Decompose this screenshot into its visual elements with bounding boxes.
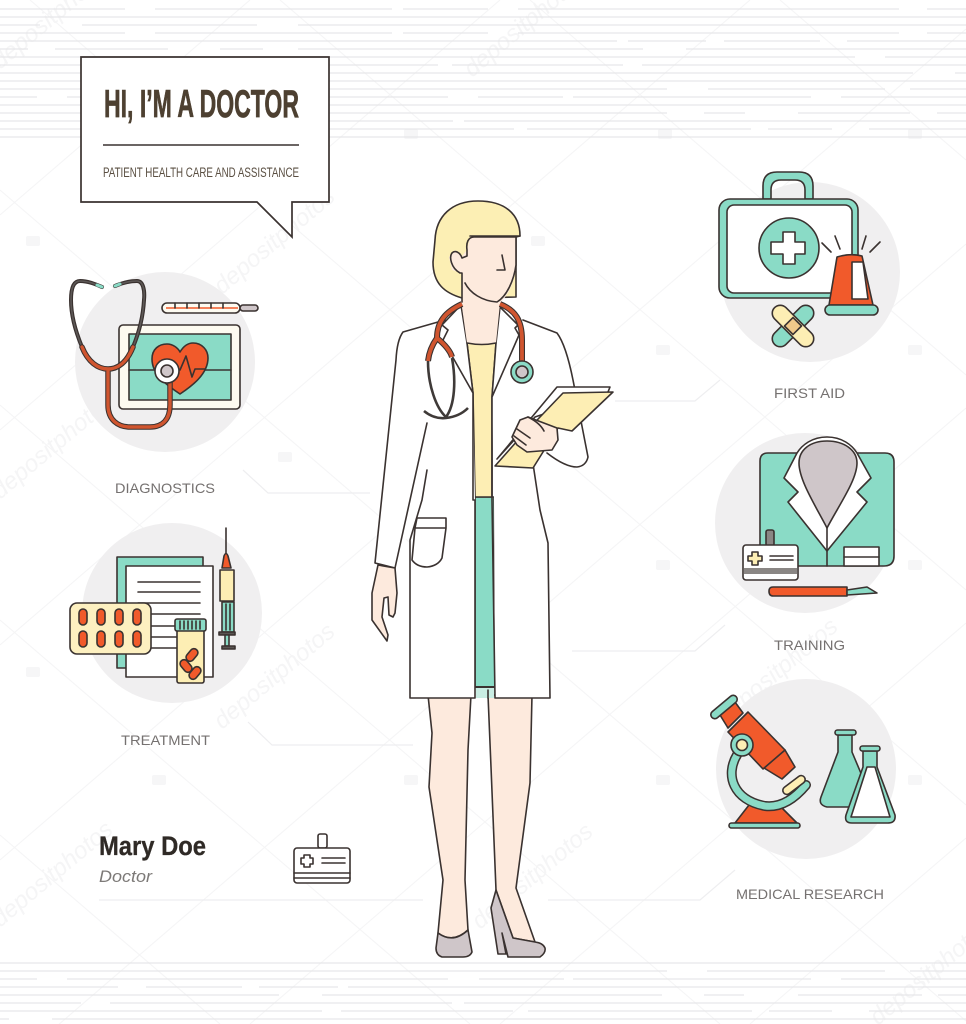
text: depositphotos bbox=[209, 618, 340, 735]
figure: doctor bbox=[372, 201, 613, 957]
icon: diagnostics bbox=[71, 272, 258, 452]
label: medical research: MEDICAL RESEARCH bbox=[736, 886, 884, 902]
legs and shoes bbox=[428, 695, 545, 957]
skirt bbox=[475, 497, 495, 687]
icon: training bbox=[715, 433, 895, 613]
left hand bbox=[372, 565, 397, 641]
text: depositphotos bbox=[467, 818, 598, 935]
speech bubble title bbox=[81, 57, 329, 237]
name: Mary Doe bbox=[99, 831, 206, 861]
label: training: TRAINING bbox=[774, 637, 845, 653]
clipboard bbox=[495, 387, 613, 468]
text: depositphotos bbox=[209, 183, 340, 300]
icon: first aid bbox=[719, 172, 900, 362]
label: first aid: FIRST AID bbox=[774, 385, 845, 401]
shirt bbox=[467, 343, 496, 497]
role: Doctor bbox=[99, 867, 153, 886]
heading: HI, I’M A DOCTOR bbox=[104, 83, 299, 126]
icon: treatment bbox=[70, 523, 262, 703]
label: diagnostics: DIAGNOSTICS bbox=[115, 480, 215, 496]
icon: id badge bbox=[294, 834, 350, 883]
subheading: PATIENT HEALTH CARE AND ASSISTANCE bbox=[103, 165, 299, 180]
hand on clipboard bbox=[512, 417, 558, 452]
label: treatment: TREATMENT bbox=[121, 732, 210, 748]
head and hair bbox=[433, 201, 520, 344]
lab coat bbox=[375, 305, 588, 698]
stethoscope bbox=[424, 304, 533, 418]
name block bbox=[99, 831, 206, 886]
icon: medical research bbox=[709, 679, 896, 859]
text: depositphotos bbox=[712, 613, 843, 730]
text: depositphotos bbox=[715, 180, 846, 297]
